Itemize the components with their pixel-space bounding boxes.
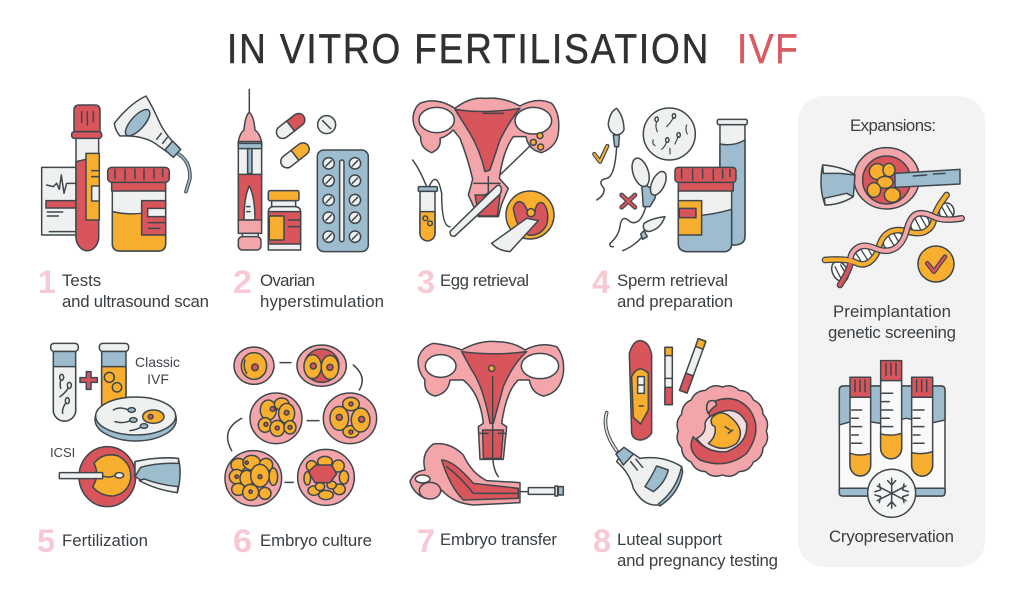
heading: expansions: Expansions: [850, 116, 936, 135]
step 2 label: Ovarian [260, 271, 315, 290]
step 1 label: and ultrasound scan [62, 292, 209, 311]
step 8 label: and pregnancy testing [617, 551, 778, 570]
step 8 label [617, 530, 778, 570]
label: classic IVF: IVF [147, 371, 169, 387]
panel: step 7 embryo transfer [410, 341, 564, 559]
step 5 label: Fertilization [62, 531, 148, 550]
panel: step 4 sperm retrieval and preparation [592, 108, 747, 311]
panel: expansions background [798, 96, 985, 567]
illustration: embryo biopsy, DNA helix, check mark [821, 148, 962, 285]
step number 3: 3 [417, 264, 435, 300]
illustration: injection pen, pills, blister pack [238, 89, 368, 252]
step 1 label [62, 271, 209, 311]
step number 6: 6 [233, 523, 252, 559]
step 2 label [260, 271, 384, 311]
step 2 label: hyperstimulation [260, 292, 384, 311]
illustration: uterus, retrieval needle, collection tube, ultrasound view [413, 98, 559, 252]
step 4 label: and preparation [617, 292, 733, 311]
step number 4: 4 [592, 264, 610, 300]
panel: step 3 egg retrieval [413, 98, 559, 300]
illustration: blood tube, urine cup, ultrasound probe, chart [42, 96, 190, 251]
step 7 label: Embryo transfer [440, 530, 557, 549]
step 4 label [617, 271, 733, 311]
title: IN VITRO FERTILISATION [227, 26, 708, 73]
label: preimplantation genetic screening: genetic screening [828, 323, 956, 342]
panel: step 8 luteal support and pregnancy testing [593, 339, 778, 570]
label: preimplantation genetic screening [828, 302, 956, 342]
title: IVF [737, 26, 798, 73]
illustration: pregnancy test, strips, ultrasound, fetus [605, 339, 768, 506]
illustration: test tubes, petri dish, ICSI injection [51, 343, 180, 507]
step 8 label: Luteal support [617, 530, 722, 549]
step number 5: 5 [37, 523, 55, 559]
panel: step 2 ovarian hyperstimulation [233, 89, 384, 311]
step number 2: 2 [233, 264, 252, 300]
label: classic IVF: Classic [135, 354, 180, 370]
step 1 label: Tests [62, 271, 101, 290]
label: classic IVF [135, 354, 180, 387]
panel: step 1 tests and ultrasound scan [38, 96, 209, 311]
step number 8: 8 [593, 523, 611, 559]
step number 1: 1 [38, 264, 56, 300]
illustration: uterus front and side view with syringe [410, 341, 564, 505]
label: cryopreservation: Cryopreservation [829, 527, 954, 546]
step number 7: 7 [417, 523, 435, 559]
panel: step 5 fertilization [37, 343, 180, 559]
step 4 label: Sperm retrieval [617, 271, 728, 290]
panel: step 6 embryo culture [225, 345, 377, 559]
label: preimplantation genetic screening: Preimplantation [833, 302, 951, 321]
label: ICSI: ICSI [50, 445, 75, 460]
step 6 label: Embryo culture [260, 531, 372, 550]
panel: expansions content [821, 116, 962, 546]
step 3 label: Egg retrieval [440, 271, 529, 290]
illustration: cryopreservation tubes and snowflake [839, 361, 945, 517]
illustration: embryo development sequence [225, 345, 377, 506]
illustration: sperm samples, microscope view, test tube, specimen cup [594, 108, 747, 252]
